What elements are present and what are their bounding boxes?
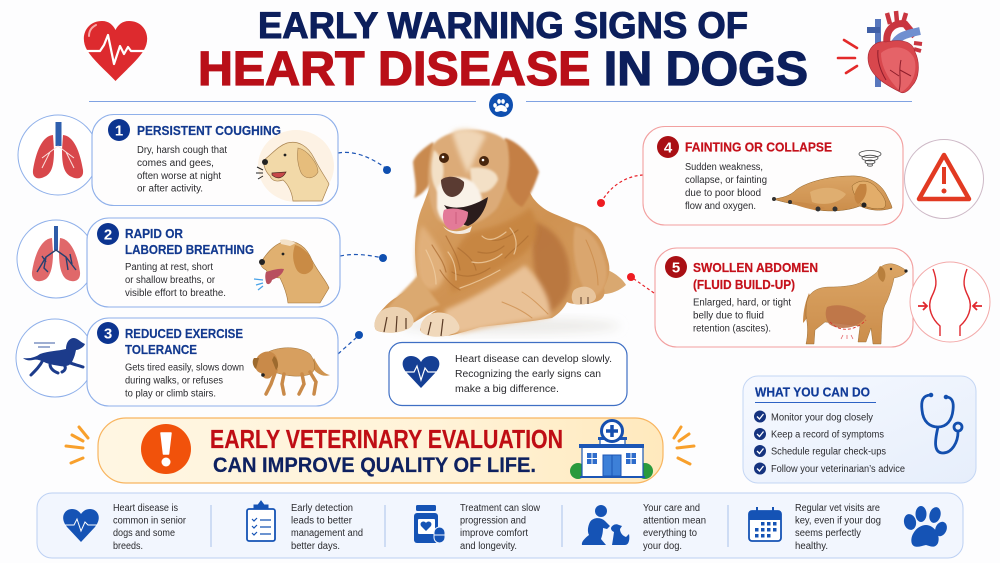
checklist [754,410,906,475]
card [655,248,913,347]
icon: clipboard checklist [247,501,275,541]
rear haunch [573,226,607,297]
icon: veterinary clinic [570,420,653,479]
chest light fur [416,225,445,290]
head [428,130,509,226]
fact 3 [460,503,541,552]
icon: medicine bottle [414,505,445,543]
front arm [445,265,550,333]
banner: early veterinary evaluation [66,418,694,483]
right paw [420,313,459,337]
fact 1: dogs and some [113,528,176,539]
bottom facts bar [37,493,963,558]
checklist: Schedule regular check-ups [771,446,886,458]
icon: paw badge [493,99,509,112]
panel 4: fainting or collapse [643,126,984,225]
burst left [66,427,88,463]
callout text: make a big difference. [455,384,559,395]
description: collapse, or fainting [685,175,767,186]
heading: SWOLLEN ABDOMEN [693,260,818,275]
icon: heart with ECG [84,21,147,81]
callout text [455,354,612,395]
icon circle: abdomen outline [910,262,990,342]
panel 1: persistent coughing [18,114,338,206]
title line 2: HEART DISEASE IN DOGS [198,43,808,96]
fact 2: better days. [291,541,340,552]
left ear [413,142,436,198]
mane shading [450,208,537,292]
fact 3: Treatment can slow [460,503,541,514]
callout text: Heart disease can develop slowly. [455,354,612,365]
heading [693,260,818,292]
number badge: 1 [115,122,123,140]
number badge [665,256,687,278]
heading: REDUCED EXERCISE [125,326,243,341]
checklist: Keep a record of symptoms [771,430,884,440]
description [693,298,791,334]
tail [597,268,626,294]
number badge [657,136,679,158]
right ear [501,138,539,207]
forehead blaze [452,129,486,174]
shadow [400,318,620,334]
panel: what you can do [743,376,976,483]
nose [441,177,464,197]
icon: collapsed dog [772,150,892,212]
icon: person with dog [582,505,629,545]
description [685,162,767,212]
fact 5: key, even if your dog [795,516,881,526]
card [643,126,903,225]
card [92,114,338,206]
description: or after activity. [137,184,203,194]
description [137,145,227,194]
heading: WHAT YOU CAN DO [755,384,870,400]
description: due to poor blood [685,188,761,199]
icon: blue heart [63,509,99,542]
checklist: Monitor your dog closely [771,412,873,424]
fact 1: common in senior [113,516,187,526]
description: visible effort to breathe. [125,288,226,299]
title [198,5,808,96]
fact 4: Your care and [643,503,700,514]
heading: (FLUID BUILD-UP) [693,277,795,292]
icon: coughing dog [256,130,334,202]
description: Dry, harsh cough that [137,145,227,156]
description: Panting at rest, short [125,262,213,273]
icon: dog with swollen belly [803,264,908,344]
fur strands [426,228,598,318]
banner text: EARLY VETERINARY EVALUATION [210,424,563,454]
fact 4: your dog. [643,541,682,552]
icon: heart [403,356,439,388]
description [125,262,226,299]
description: belly due to fluid [693,310,764,322]
panel 2: rapid or labored breathing [17,218,340,307]
fact 1: Heart disease is [113,503,178,514]
icon: stethoscope [922,393,962,453]
number badge [108,119,130,141]
fact 5: Regular vet visits are [795,503,881,514]
panel 3: reduced exercise tolerance [16,318,338,406]
fact 4 [643,503,706,552]
left leg [388,275,440,322]
description: flow and oxygen. [685,201,756,212]
fact 4: attention mean [643,516,706,526]
burst right [674,427,694,464]
fact 2: management and [291,528,363,539]
description: Enlarged, hard, or tight [693,298,791,308]
lower lip [443,226,472,234]
description: Sudden weakness, [685,162,763,173]
description: or shallow breaths, or [125,275,216,286]
icon: exclamation [141,424,191,474]
fact 5: healthy. [795,541,828,552]
heading [125,326,243,357]
icon circle: lungs [17,220,95,298]
connector lines [338,152,654,354]
eyes [439,153,449,163]
fact 2: Early detection [291,503,353,514]
description: to play or climb stairs. [125,388,216,400]
icon: paw [902,506,949,547]
fact 5 [795,503,881,552]
description: often worse at night [137,171,221,182]
face light patches [431,150,498,193]
heading [125,226,254,257]
fact 5: seems perfectly [795,528,861,539]
fact 3: progression and [460,516,526,526]
heading: PERSISTENT COUGHING [137,123,281,138]
tongue [443,209,468,230]
fact 4: everything to [643,528,698,539]
heading: FAINTING OR COLLAPSE [685,140,832,154]
mouth [444,197,488,226]
fact 1: breeds. [113,541,143,552]
checklist: Follow your veterinarian’s advice [771,464,906,475]
body silhouette [375,150,609,336]
fact 2 [291,503,363,552]
description: during walks, or refuses [125,376,223,386]
callout: heart disease can develop slowly [389,342,627,406]
number badge: 5 [672,260,680,276]
description: Gets tired easily, slows down [125,362,244,374]
central golden retriever illustration [375,129,626,337]
icon circle: running dog [16,319,94,397]
fact 3: and longevity. [460,541,517,552]
heading: RAPID OR [125,226,184,241]
panel 5: swollen abdomen [655,248,990,347]
icon: panting dog [254,239,329,303]
number badge [97,223,119,245]
callout text: Recognizing the early signs can [455,369,601,380]
divider with paw badge [89,93,912,117]
heading: TOLERANCE [125,342,197,357]
muzzle [437,177,482,227]
card [87,318,338,406]
card [87,218,340,307]
icon: calendar [749,507,781,541]
fact 3: improve comfort [460,528,528,539]
title line 1: EARLY WARNING SIGNS OF [258,5,748,46]
number badge: 3 [104,326,112,342]
banner: early veterinary evaluation: CAN IMPROVE QUALITY OF LIFE. [213,453,536,477]
icon: anatomical heart [838,11,922,93]
icon: tired dog [253,348,330,394]
number badge: 4 [664,140,673,156]
fact 2: leads to better [291,516,353,526]
rear paw [572,287,596,305]
description [125,362,244,400]
description: comes and gees, [137,158,214,169]
left paw [375,307,414,333]
number badge [97,322,119,344]
description: retention (ascites). [693,324,771,334]
flank shading [533,222,570,316]
number badge: 2 [104,226,112,244]
heading: LABORED BREATHING [125,242,254,257]
icon circle: lungs [18,115,98,195]
icon circle: warning [904,140,984,218]
fact 1 [113,503,187,552]
